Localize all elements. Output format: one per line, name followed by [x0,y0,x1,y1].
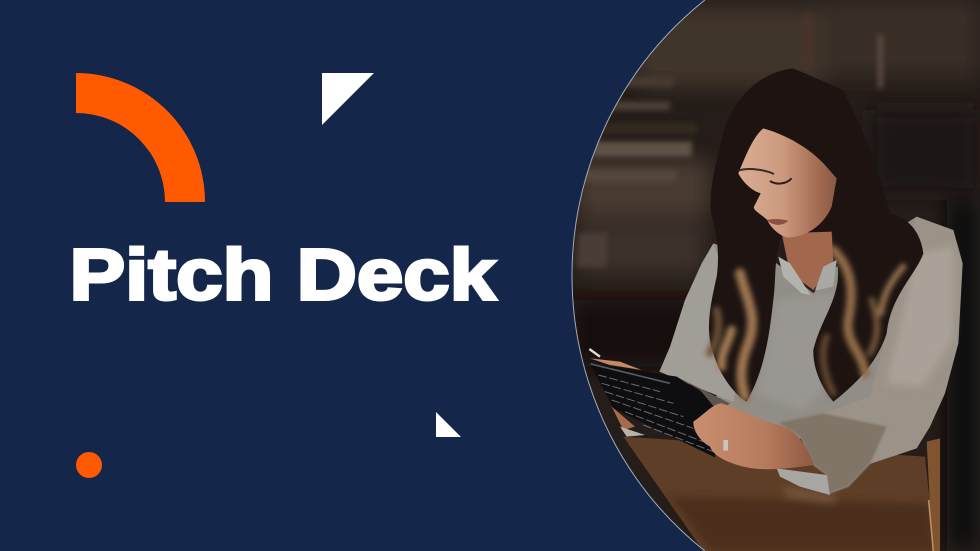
torso [713,217,937,440]
photo: face [738,128,837,237]
small white triangle [436,412,461,437]
sleeve cuff [778,413,887,494]
photo: woman reading a tablet, in circular crop [570,0,980,551]
photo: table [623,437,940,551]
photo: hands and stylus [589,349,814,469]
photo crop outline [572,0,705,551]
white triangle top [322,73,374,125]
orange dot [76,452,102,478]
photo: sweater [659,217,963,495]
photo: tablet [590,363,730,457]
photo: dark wall [570,0,980,551]
title: Pitch Deck [70,236,497,316]
right sleeve [777,217,963,494]
orange quarter arc [76,73,205,202]
photo: neck and collar [778,232,837,295]
white inner cuff [777,468,830,495]
photo: hair [709,68,923,402]
left sleeve [659,244,735,402]
